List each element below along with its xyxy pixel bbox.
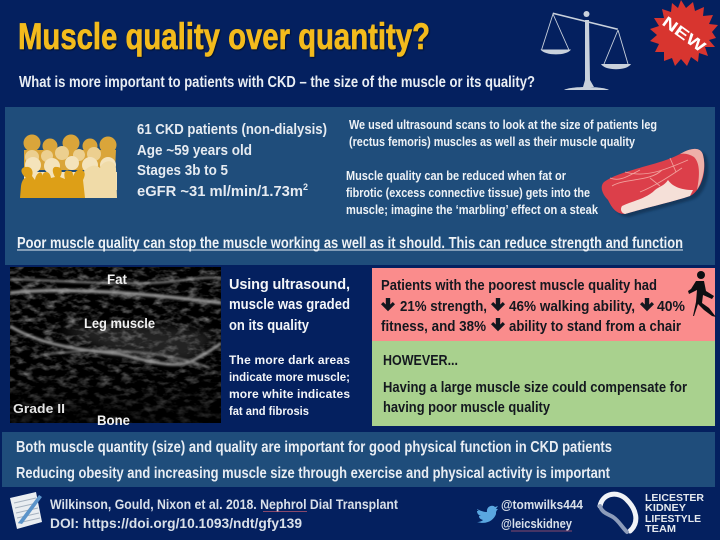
marbling explanation text: muscle; imagine the ‘marbling’ effect on a steak [346,203,598,217]
social handles: @leicskidney [501,517,572,531]
ultrasound interpretation text: indicate more muscle; [229,370,350,384]
participant details: 61 CKD patients (non-dialysis) [137,122,327,138]
logo: team name [645,492,704,535]
compensation text: having poor muscle quality [383,399,551,416]
findings text: 46% walking ability, [509,298,635,315]
ultrasound image [10,267,221,428]
new label: NEW [659,13,709,56]
label: grade: Grade II [13,401,65,416]
title: Muscle quality over quantity? [18,16,430,57]
label: leg muscle: Leg muscle [84,315,155,331]
findings text [381,277,685,335]
icon: new badge [650,0,718,66]
participant details: Stages 3b to 5 [137,163,228,179]
logo: kidney [600,494,636,532]
marbling explanation text: Muscle quality can be reduced when fat or [346,169,566,183]
participant details: 2 [303,182,308,192]
ultrasound interpretation text: fat and fibrosis [229,404,309,418]
marbling explanation text: fibrotic (excess connective tissue) gets into the [346,186,590,200]
ultrasound grading heading: muscle was graded [229,297,350,313]
participant details: Age ~59 years old [137,143,252,159]
findings text: ability to stand from a chair [509,318,681,335]
ultrasound method text [349,118,657,149]
panel: conclusions [2,432,715,487]
ultrasound interpretation text [229,353,350,418]
panel: functional findings [372,268,716,342]
findings text: Patients with the poorest muscle quality had [381,277,657,294]
ultrasound grading heading: on its quality [229,318,309,334]
ultrasound grading heading: Using ultrasound, [229,277,350,293]
icon: walking person [688,271,716,317]
icon: patient group [20,134,117,198]
ultrasound grading heading [229,277,350,334]
findings text: fitness, and 38% [381,318,486,335]
logo: team name: KIDNEY [645,502,686,514]
marbling explanation text [346,169,598,217]
participant details [137,122,327,200]
icon: balance scale [540,11,631,90]
participant details: eGFR ~31 ml/min/1.73m [137,184,303,200]
subtitle: What is more important to patients with CKD – the size of the muscle or its quality? [19,74,535,91]
logo: team name: TEAM [645,523,676,535]
panel: compensation [372,341,715,426]
icon: notepad and pen [10,492,42,529]
citation: DOI: https://doi.org/10.1093/ndt/gfy139 [50,515,302,531]
social handles [501,498,583,531]
label: fat: Fat [107,271,127,287]
logo: team name: LEICESTER [645,492,704,504]
ultrasound interpretation text: The more dark areas [229,353,350,367]
findings text: 21% strength, [400,298,487,315]
compensation heading: HOWEVER... [383,353,458,369]
conclusion one: Both muscle quantity (size) and quality are important for good physical function in CKD patients [16,439,612,456]
ultrasound method text: We used ultrasound scans to look at the size of patients leg [349,118,657,132]
conclusion two: Reducing obesity and increasing muscle size through exercise and physical activity is important [16,465,610,482]
panel: study summary [5,107,715,265]
social handles: @tomwilks444 [501,498,583,512]
label: bone: Bone [97,412,130,428]
findings text: 40% [657,298,685,315]
citation [50,496,398,531]
icon: twitter bird [477,506,498,523]
icon: steak [602,149,708,217]
ultrasound method text: (rectus femoris) muscles as well as their muscle quality [349,135,635,149]
logo: team name: LIFESTYLE [645,513,701,525]
compensation text [383,379,687,416]
ultrasound interpretation text: more white indicates [229,387,350,401]
citation: Wilkinson, Gould, Nixon et al. 2018. Nephrol Dial Transplant [50,496,398,512]
